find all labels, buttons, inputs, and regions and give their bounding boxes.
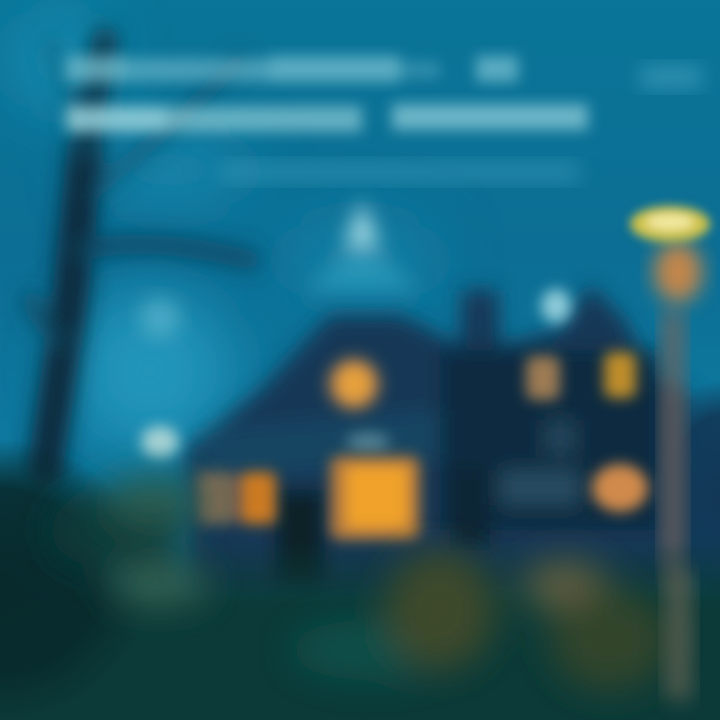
icon: pale spot at left [140, 298, 180, 338]
foreground: dark foliage base [0, 540, 720, 720]
windows: warm lit [196, 352, 648, 540]
pale spots on the house [141, 289, 571, 458]
title: illegible heading line 1 [66, 56, 518, 82]
foreground: left foliage shade [0, 440, 300, 720]
lamp post [662, 310, 684, 700]
window: ground left [196, 472, 276, 524]
icon: triangular marker above roof [305, 200, 420, 290]
window: upper right pair [526, 352, 636, 400]
lamp lower glow [654, 242, 702, 302]
window: lower right [592, 464, 648, 512]
sky tonal patches [10, 10, 440, 450]
foreground: foliage clumps [50, 475, 670, 690]
title: illegible heading line 2 [66, 104, 588, 132]
window: upper centre [325, 355, 383, 413]
logo: top right mark [640, 66, 702, 88]
tree: bare branches on the left [30, 40, 250, 470]
street lamp [630, 206, 710, 700]
lamp post base in front of foliage [666, 570, 692, 700]
window: ground centre [330, 456, 420, 540]
house: dark silhouette [185, 285, 690, 600]
lamp head [630, 206, 710, 242]
subtitle: illegible text line [220, 162, 580, 182]
house: right edge [580, 380, 720, 620]
